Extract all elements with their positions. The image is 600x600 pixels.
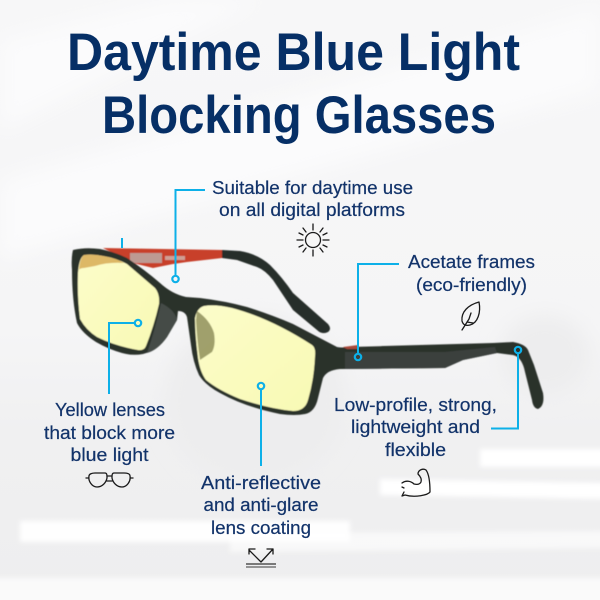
right lens shadow [196, 311, 215, 360]
icon: flexed arm [402, 469, 430, 496]
title [67, 23, 520, 145]
callout: yellow lenses: blue light [70, 445, 148, 465]
near arm shading [345, 347, 497, 369]
callout: frame strength: flexible [385, 440, 446, 460]
callout: daytime use: Suitable for daytime use [212, 178, 413, 198]
blue tick above arm [121, 238, 123, 248]
callout: daytime use: on all digital platforms [219, 200, 405, 220]
callout: lens coating: Anti-reflective [201, 473, 321, 493]
front frame and near arm [72, 248, 543, 415]
callout: daytime use [172, 178, 413, 282]
left lens reflection [79, 255, 124, 270]
frame side shading [147, 303, 177, 353]
callout: yellow lenses: that block more [44, 423, 175, 443]
glasses [72, 248, 543, 415]
icon: light reflection [246, 549, 276, 567]
icon: eyeglasses [86, 473, 133, 487]
callout: lens coating [201, 383, 321, 538]
icon: sun [297, 224, 329, 256]
callout: frame strength [334, 347, 521, 460]
callout: acetate frames: Acetate frames [408, 252, 535, 272]
title: Daytime Blue Light [67, 23, 520, 82]
callout: acetate frames [355, 252, 535, 360]
icon: leaf [462, 302, 480, 330]
callout: frame strength: lightweight and [351, 417, 480, 437]
callout: lens coating: and anti-glare [204, 495, 318, 515]
left lens [78, 255, 159, 350]
red arm hinge detail [343, 345, 358, 349]
callout: lens coating: lens coating [211, 518, 311, 538]
title: Blocking Glasses [102, 86, 496, 145]
far temple arm [103, 248, 330, 333]
callout: yellow lenses [44, 320, 175, 465]
callout: acetate frames: (eco-friendly) [416, 275, 527, 295]
right lens [195, 305, 315, 411]
callout: yellow lenses: Yellow lenses [55, 400, 165, 420]
callout: frame strength: Low-profile, strong, [334, 395, 497, 415]
